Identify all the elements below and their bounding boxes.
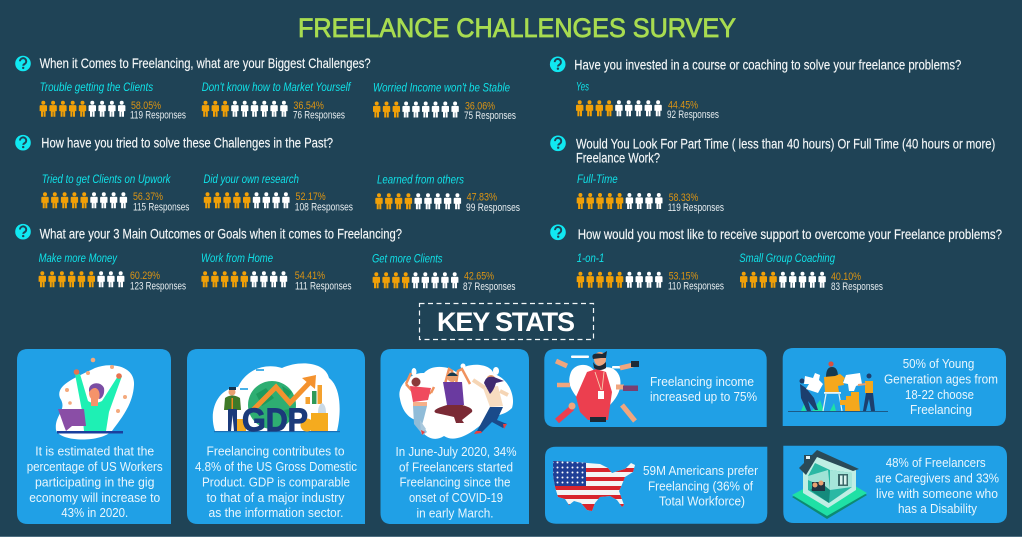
icon: man surrounded by hands xyxy=(556,351,639,422)
key stats heading xyxy=(420,304,594,340)
stat text: are Caregivers and 33% xyxy=(875,470,999,486)
stat: own research xyxy=(204,174,353,214)
stat: own research: Did your own research xyxy=(204,174,299,186)
icon: three jumping friends xyxy=(399,364,513,439)
question icon xyxy=(15,135,31,150)
panel: Americans stat xyxy=(545,447,767,524)
stat: market yourself xyxy=(202,82,352,122)
question heading: How have you tried to solve these Challenges in the Past? xyxy=(41,136,333,151)
icon: GDP growth illustration xyxy=(213,363,340,438)
stat: trouble getting clients: 119 Responses xyxy=(130,110,186,122)
panel: gig economy stat xyxy=(17,349,171,524)
stat: upwork: 115 Responses xyxy=(133,202,189,214)
panel: caregivers stat xyxy=(783,446,1007,523)
stat text: as the information sector. xyxy=(208,505,344,520)
stat: trouble getting clients: Trouble getting the Clients xyxy=(40,82,153,94)
stat text: in early March. xyxy=(416,506,494,520)
stat text: Freelancing income xyxy=(650,374,754,389)
stat text: Total Workforce) xyxy=(659,494,745,508)
key stats heading: KEY STATS xyxy=(437,307,575,337)
panel: income stat xyxy=(544,349,767,427)
stat: more clients xyxy=(372,254,516,293)
stat: more money: 60.29% xyxy=(130,270,160,282)
stat: more money xyxy=(39,253,186,292)
stat: more money: 123 Responses xyxy=(130,280,186,292)
stat: income stability xyxy=(373,82,516,122)
stat text: Product. GDP is comparable xyxy=(202,474,350,490)
stat text: Freelancing since the xyxy=(400,474,510,490)
stat: more clients: Get more Clients xyxy=(372,254,443,266)
stat text: Freelancing xyxy=(910,402,972,417)
stat: 1-on-1 xyxy=(577,253,724,292)
stat: more clients: 87 Responses xyxy=(463,281,516,293)
stat text: 50% of Young xyxy=(903,356,974,371)
icon: US flag map xyxy=(553,461,635,511)
question icon xyxy=(550,224,566,240)
stat: small group coaching xyxy=(739,253,883,293)
stat text: to that of a major industry xyxy=(206,490,345,505)
stat: learned from others: 47.83% xyxy=(467,192,497,204)
stat text: 43% in 2020. xyxy=(61,505,128,520)
stat: trouble getting clients: 58.05% xyxy=(131,100,161,112)
stat text: participating in the gig xyxy=(35,474,154,490)
stat text: onset of COVID-19 xyxy=(409,490,503,505)
stat text: live with someone who xyxy=(876,486,998,501)
stat: more money: Make more Money xyxy=(39,253,118,265)
question icon xyxy=(550,136,566,151)
panel: GDP stat xyxy=(187,349,365,524)
stat: small group coaching: 83 Responses xyxy=(831,281,883,293)
stat: market yourself: 76 Responses xyxy=(293,110,345,122)
stat: small group coaching: 40.10% xyxy=(831,271,861,283)
question icon xyxy=(15,56,31,71)
stat: yes: 44.45% xyxy=(668,100,698,112)
panel: young generation stat xyxy=(783,348,1006,426)
stat: own research: 52.17% xyxy=(296,191,326,203)
stat: market yourself: 36.54% xyxy=(293,100,324,112)
stat: work from home xyxy=(201,253,352,292)
stat: full-time: Full-Time xyxy=(577,174,618,186)
stat: trouble getting clients xyxy=(40,82,186,122)
stat: learned from others xyxy=(375,174,520,214)
stat: 1-on-1: 110 Responses xyxy=(668,280,724,292)
stat: income stability: 36.06% xyxy=(465,100,495,112)
panel: part or full time question xyxy=(550,136,995,214)
stat: 1-on-1: 1-on-1 xyxy=(577,253,604,265)
panel: support preference question xyxy=(550,224,1002,293)
stat: full-time: 58.33% xyxy=(669,192,698,204)
stat text: Generation ages from xyxy=(884,372,998,386)
stat: yes xyxy=(576,82,719,121)
question icon xyxy=(15,224,31,240)
stat: learned from others: Learned from others xyxy=(377,174,464,186)
stat text: of Freelancers started xyxy=(399,460,513,474)
stat: income stability: Worried Income won't be Stable xyxy=(373,82,510,94)
panel: goals question xyxy=(15,224,515,293)
stat: market yourself: Don't know how to Market Yourself xyxy=(202,82,352,94)
question heading: Freelance Work? xyxy=(576,151,660,166)
panel: COVID freelancers stat xyxy=(380,349,529,524)
title: FREELANCE CHALLENGES SURVEY xyxy=(298,13,736,43)
stat: upwork xyxy=(41,174,189,214)
stat: yes: Yes xyxy=(576,82,589,94)
panel: course investment question xyxy=(550,57,962,121)
stat: work from home: 111 Responses xyxy=(295,280,352,292)
stat: full-time xyxy=(577,174,724,214)
stat text: It is estimated that the xyxy=(35,444,154,458)
stat text: Freelancing contributes to xyxy=(206,444,344,458)
panel: biggest challenges question xyxy=(15,56,516,122)
icon: team assembling puzzle xyxy=(788,361,888,412)
stat: 1-on-1: 53.15% xyxy=(669,271,698,283)
stat text: 59M Americans prefer xyxy=(643,463,759,478)
stat text: 4.8% of the US Gross Domestic xyxy=(195,459,357,474)
stat text: percentage of US Workers xyxy=(27,459,163,474)
stat text: 18-22 choose xyxy=(905,387,974,402)
panel: past solutions question xyxy=(15,135,520,214)
icon: GDP growth illustration: GDP xyxy=(242,402,308,438)
stat: own research: 108 Responses xyxy=(295,202,353,214)
stat: upwork: 56.37% xyxy=(133,191,163,203)
icon: celebrating worker at desk xyxy=(56,358,134,440)
stat: more clients: 42.65% xyxy=(464,270,494,282)
question icon xyxy=(550,57,566,72)
stat: upwork: Tried to get Clients on Upwork xyxy=(42,174,172,186)
stat: work from home: 54.41% xyxy=(295,270,325,282)
stat: full-time: 119 Responses xyxy=(668,202,724,214)
stat: income stability: 75 Responses xyxy=(464,110,516,122)
stat: small group coaching: Small Group Coaching xyxy=(739,253,835,265)
stat: yes: 92 Responses xyxy=(667,109,719,121)
icon: isometric house xyxy=(792,450,867,519)
stat text: increased up to 75% xyxy=(650,389,757,404)
question heading: When it Comes to Freelancing, what are your Biggest Challenges? xyxy=(40,56,371,71)
stat text: In June-July 2020, 34% xyxy=(396,444,517,459)
stat: work from home: Work from Home xyxy=(201,253,273,265)
stat: learned from others: 99 Responses xyxy=(466,202,520,214)
stat text: has a Disability xyxy=(898,501,977,516)
question heading: What are your 3 Main Outcomes or Goals when it comes to Freelancing? xyxy=(40,226,402,242)
stat text: 48% of Freelancers xyxy=(886,455,986,470)
stat text: Freelancing (36% of xyxy=(648,478,753,494)
stat text: economy will increase to xyxy=(29,490,160,505)
